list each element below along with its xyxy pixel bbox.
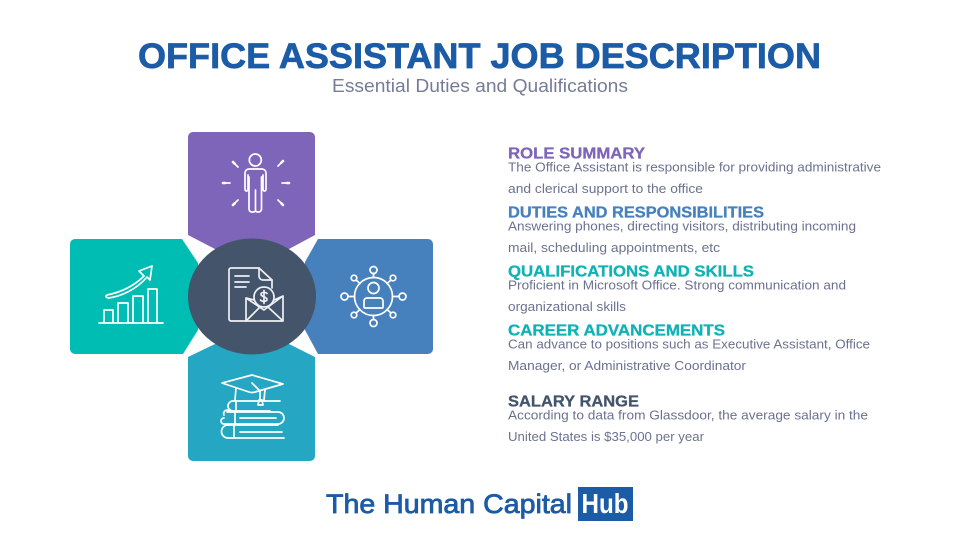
text: career advancements: CAREER ADVANCEMENTS [508, 322, 725, 340]
text: career advancements: Can advance to positions such as Executive Assistant, Office [508, 336, 870, 352]
text: salary range: SALARY RANGE [508, 394, 639, 410]
text: salary range: United States is $35,000 per year [508, 429, 705, 444]
panel: teal petal [70, 239, 198, 354]
text: role summary: ROLE SUMMARY [508, 146, 645, 162]
icon: growth bar chart [99, 266, 163, 323]
text: qualifications and skills: Proficient in Microsoft Office. Strong communication and [508, 278, 846, 292]
panel: purple petal [188, 132, 315, 249]
text: role summary: The Office Assistant is responsible for providing administrative [508, 160, 881, 174]
text: salary range: According to data from Glassdoor, the average salary in the [508, 408, 868, 422]
icon: network person [341, 266, 406, 326]
panel: blue petal [305, 239, 433, 354]
text: duties and responsibilities: Answering phones, directing visitors, distributing incoming [508, 218, 856, 234]
diagram: four petals around centre [70, 132, 433, 461]
text: career advancements: Manager, or Administrative Coordinator [508, 358, 747, 373]
text: qualifications and skills [508, 264, 846, 314]
text: qualifications and skills: organizational skills [508, 299, 626, 314]
logo: The Human Capital Hub [326, 487, 633, 521]
text: qualifications and skills: QUALIFICATIONS AND SKILLS [508, 264, 754, 280]
panel: cyan petal [188, 344, 315, 461]
text: role summary: and clerical support to the office [508, 181, 703, 196]
text: role summary [508, 146, 881, 196]
logo: The Human Capital Hub: Hub [582, 488, 628, 519]
icon: person with arrows [223, 154, 289, 212]
text: career advancements [508, 322, 870, 373]
icon: document and salary envelope [229, 268, 283, 321]
subtitle: Essential Duties and Qualifications [332, 76, 628, 96]
logo: The Human Capital Hub: The Human Capital [326, 489, 572, 519]
text: duties and responsibilities [508, 204, 856, 255]
centre circle [188, 238, 316, 354]
icon: graduation cap on books [221, 375, 284, 438]
text: salary range [508, 394, 868, 444]
text: duties and responsibilities: DUTIES AND RESPONSIBILITIES [508, 204, 764, 222]
title: OFFICE ASSISTANT JOB DESCRIPTION [138, 36, 821, 76]
text: duties and responsibilities: mail, scheduling appointments, etc [508, 240, 721, 255]
